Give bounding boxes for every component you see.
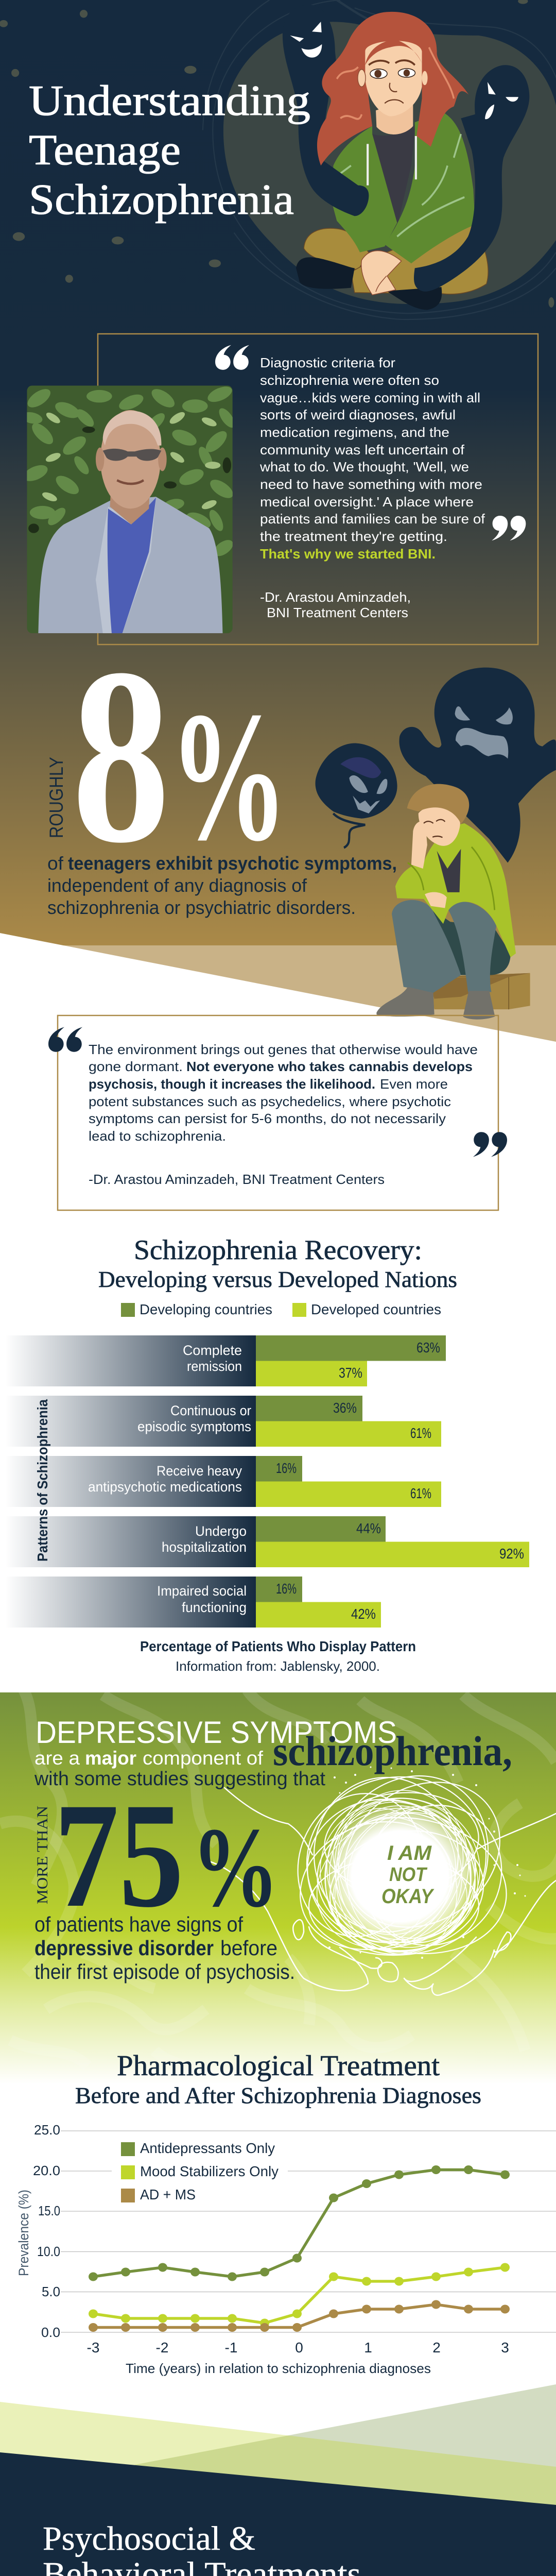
legend: countries: Developing countries <box>140 1301 272 1317</box>
legend: Antidepressants Only <box>140 2140 275 2156</box>
text: founder quote <box>259 355 485 620</box>
text: founder quote: what to do. We thought, 'Well, we <box>259 459 469 474</box>
icon: opening quote <box>215 345 249 370</box>
text: founder quote: need to have something with more <box>260 477 482 492</box>
axis label: Patterns of Schizophrenia <box>34 1399 50 1562</box>
illustration: scribble ball with hands <box>204 1746 556 1995</box>
title: Teenage <box>29 126 181 174</box>
stat: roughly 8 percent <box>46 616 288 895</box>
x axis labels: 0 <box>295 2340 303 2355</box>
text: 8 percent description <box>47 853 397 918</box>
text: founder quote: BNI Treatment Centers <box>267 605 408 620</box>
row: complete remission: 63% <box>416 1340 440 1355</box>
line chart: prevalence <box>16 2122 556 2376</box>
text: I am not okay: NOT <box>389 1864 427 1886</box>
x axis labels: 3 <box>501 2340 509 2355</box>
grid lines <box>61 2131 556 2332</box>
stat: roughly 8 percent: 8 <box>72 616 170 895</box>
heading: depressive symptoms: with some studies suggesting that <box>34 1768 325 1790</box>
text: founder quote: That's why we started BNI. <box>260 546 436 562</box>
ghost left <box>283 5 369 216</box>
row: continuous or episodic symptoms: Continuous or <box>170 1403 251 1418</box>
legend: Mood Stabilizers Only <box>140 2163 279 2179</box>
box <box>427 973 530 1009</box>
row: undergo hospitalization: Undergo <box>195 1523 247 1539</box>
text: founder quote: schizophrenia were often so <box>260 372 439 388</box>
text: 75 percent description: their first episode of psychosis. <box>34 1960 295 1984</box>
x axis labels: -3 <box>87 2340 99 2355</box>
row: impaired social functioning: 16% <box>276 1581 297 1597</box>
loops <box>282 1746 530 1984</box>
heading: pharmacological treatment: Pharmacological Treatment <box>117 2050 440 2082</box>
wedges above navy panel <box>0 2384 556 2514</box>
x axis labels <box>87 2340 509 2355</box>
text: 75 percent description: before <box>220 1936 277 1960</box>
row: complete remission <box>5 1335 446 1386</box>
text: 75 percent description <box>34 1912 295 1984</box>
row: continuous or episodic symptoms <box>5 1396 441 1447</box>
text: founder quote: the treatment they're getting. <box>260 529 447 544</box>
text: quote body: potent substances such as psychedelics, where psychotic <box>89 1094 451 1109</box>
icon: quote close <box>473 1132 507 1157</box>
y axis labels: 0.0 <box>41 2325 60 2340</box>
heading: depressive symptoms: schizophrenia, <box>273 1727 512 1774</box>
text: quote body: -Dr. Arastou Aminzadeh, BNI Treatment Centers <box>89 1172 385 1187</box>
boots <box>376 987 435 1016</box>
background: navy to tan gradient <box>0 0 556 948</box>
text: founder quote: patients and families can be sure of <box>260 511 485 527</box>
stat: more than 75 percent: % <box>192 1804 279 1931</box>
row: impaired social functioning: functioning <box>182 1600 247 1615</box>
text: 8 percent description: schizophrenia or psychiatric disorders. <box>47 897 356 918</box>
icon: quote open <box>48 1027 82 1052</box>
row: heavy antipsychotic medications: Receive heavy <box>157 1463 242 1479</box>
row: undergo hospitalization: 92% <box>499 1546 524 1562</box>
x axis labels: -2 <box>156 2340 168 2355</box>
text: 8 percent description: of <box>47 853 64 874</box>
panel: depressive symptoms background <box>0 1692 556 2084</box>
text: founder quote: vague…kids were coming in with all <box>260 390 480 405</box>
x axis labels: -1 <box>225 2340 237 2355</box>
backdrop blob <box>223 22 556 304</box>
legend <box>121 2140 279 2202</box>
head and arm <box>411 821 427 869</box>
background brain pattern <box>0 1692 556 2028</box>
hoodie <box>395 823 516 957</box>
row: heavy antipsychotic medications <box>5 1456 441 1507</box>
row: continuous or episodic symptoms: 36% <box>333 1400 357 1416</box>
text: 8 percent description: teenagers exhibit psychotic symptoms, <box>68 853 397 874</box>
row: complete remission: remission <box>187 1359 242 1374</box>
heading: schizophrenia recovery <box>98 1234 457 1292</box>
text: I am not okay <box>381 1842 435 1908</box>
text: chart caption: Information from: Jablensky, 2000. <box>176 1658 380 1674</box>
face <box>365 41 422 116</box>
heading: psychosocial and behavioral treatments <box>43 2520 361 2576</box>
stat: more than 75 percent: 75 <box>54 1772 184 1939</box>
text: quote body: The environment brings out genes that otherwise would have <box>89 1042 478 1057</box>
row: heavy antipsychotic medications: antipsychotic medications <box>88 1479 242 1495</box>
y axis title: Prevalence (%) <box>16 2190 31 2276</box>
heading: pharmacological treatment <box>75 2050 481 2108</box>
bar chart: patterns of schizophrenia <box>5 1335 529 1628</box>
x axis labels: 2 <box>432 2340 441 2355</box>
row: complete remission: 37% <box>339 1365 362 1381</box>
icon: closing quote <box>492 516 526 540</box>
stat: more than 75 percent <box>34 1772 279 1939</box>
y axis labels: 25.0 <box>34 2122 60 2138</box>
stat: roughly 8 percent: ROUGHLY <box>46 757 67 838</box>
heading: schizophrenia recovery: Developing versus Developed Nations <box>98 1267 457 1292</box>
text: chart caption <box>140 1638 416 1674</box>
y axis labels: 15.0 <box>38 2203 60 2218</box>
row: impaired social functioning: 42% <box>351 1606 376 1622</box>
row: continuous or episodic symptoms: 61% <box>410 1425 431 1441</box>
text: founder quote: community was left uncertain of <box>260 442 465 457</box>
small blob ghost <box>316 743 397 819</box>
y axis labels: 10.0 <box>37 2244 60 2259</box>
heading: depressive symptoms: are a <box>34 1748 80 1769</box>
beige floor and white wedge <box>0 933 556 1247</box>
x axis labels: 1 <box>364 2340 372 2355</box>
x axis title: Time (years) in relation to schizophrenia diagnoses <box>126 2361 431 2376</box>
scribble core <box>322 1766 526 1959</box>
stat: more than 75 percent: MORE THAN <box>34 1806 51 1904</box>
row: undergo hospitalization: 44% <box>356 1520 381 1536</box>
heading: depressive symptoms <box>34 1715 512 1790</box>
text: quote body: symptoms can persist for 5-6 months, do not necessarily <box>89 1111 446 1126</box>
ghost right <box>414 65 529 292</box>
blazer <box>38 497 223 633</box>
text: quote body: lead to schizophrenia. <box>89 1128 226 1144</box>
heading: depressive symptoms: component of <box>143 1748 264 1769</box>
text: 8 percent description: independent of any diagnosis of <box>47 875 307 896</box>
text: quote body: Even more <box>380 1076 448 1092</box>
text: founder quote: Diagnostic criteria for <box>260 355 395 370</box>
series: antidepressants <box>89 2165 510 2281</box>
legend: countries <box>121 1301 441 1317</box>
heading: psychosocial and behavioral treatments: Psychosocial & <box>43 2520 255 2557</box>
series: AD + MS <box>89 2300 510 2332</box>
row: continuous or episodic symptoms: episodic symptoms <box>137 1419 251 1434</box>
text: founder quote: sorts of weird diagnoses, awful <box>260 407 456 422</box>
title: Understanding <box>29 77 310 125</box>
jacket <box>333 126 397 252</box>
heading: schizophrenia recovery: Schizophrenia Recovery: <box>134 1234 422 1265</box>
legend: countries: Developed countries <box>311 1301 441 1317</box>
text: quote body: gone dormant. <box>89 1059 183 1074</box>
text: quote body <box>89 1042 478 1187</box>
row: impaired social functioning <box>5 1577 381 1628</box>
y axis labels: 5.0 <box>42 2284 60 2299</box>
text: quote body: Not everyone who takes cannabis develops <box>186 1059 473 1074</box>
legend: AD + MS <box>140 2187 196 2202</box>
decorative dots <box>0 0 556 308</box>
neck and shirt <box>372 124 415 234</box>
hair back <box>317 12 468 165</box>
photo: Dr. Aminzadeh <box>21 383 237 633</box>
row: undergo hospitalization <box>5 1516 529 1567</box>
hands <box>361 251 402 295</box>
panel: psychosocial treatments <box>0 2452 556 2576</box>
heading: depressive symptoms: major <box>85 1748 136 1769</box>
shoes <box>296 257 355 289</box>
text: founder quote: -Dr. Arastou Aminzadeh, <box>260 589 411 605</box>
text: 75 percent description: of patients have signs of <box>34 1912 244 1936</box>
text: founder quote: medical oversight.' A place where <box>260 494 474 510</box>
title: Schizophrenia <box>29 176 294 224</box>
neck and head <box>110 496 149 524</box>
panel: cannabis quote <box>48 1015 507 1210</box>
row: complete remission: Complete <box>183 1343 242 1358</box>
row: heavy antipsychotic medications: 16% <box>276 1460 297 1476</box>
y axis labels: 20.0 <box>33 2163 60 2178</box>
text: 75 percent description: depressive disorder <box>34 1936 214 1960</box>
row: heavy antipsychotic medications: 61% <box>410 1485 431 1501</box>
pants <box>304 228 369 270</box>
illustration: big ghost <box>316 668 556 1020</box>
text: quote body: psychosis, though it increases the likelihood. <box>89 1076 375 1092</box>
stat: roughly 8 percent: % <box>169 673 288 879</box>
series: mood stabilizers <box>89 2263 510 2328</box>
hands and thread <box>204 1788 556 1995</box>
text: I am not okay: OKAY <box>381 1885 435 1908</box>
heading: depressive symptoms: DEPRESSIVE SYMPTOMS <box>36 1715 397 1750</box>
row: undergo hospitalization: hospitalization <box>162 1539 247 1555</box>
title <box>29 77 310 224</box>
heading: pharmacological treatment: Before and After Schizophrenia Diagnoses <box>75 2083 481 2108</box>
row: impaired social functioning: Impaired social <box>157 1583 247 1599</box>
illustration: girl with ghosts <box>203 0 556 319</box>
text: founder quote: medication regimens, and the <box>260 425 449 440</box>
shirt <box>108 498 156 633</box>
jeans <box>422 902 511 975</box>
text: I am not okay: I AM <box>387 1842 432 1865</box>
y axis labels <box>33 2122 60 2340</box>
panel: founder quote frame <box>98 334 538 645</box>
text: chart caption: Percentage of Patients Who Display Pattern <box>140 1638 416 1654</box>
